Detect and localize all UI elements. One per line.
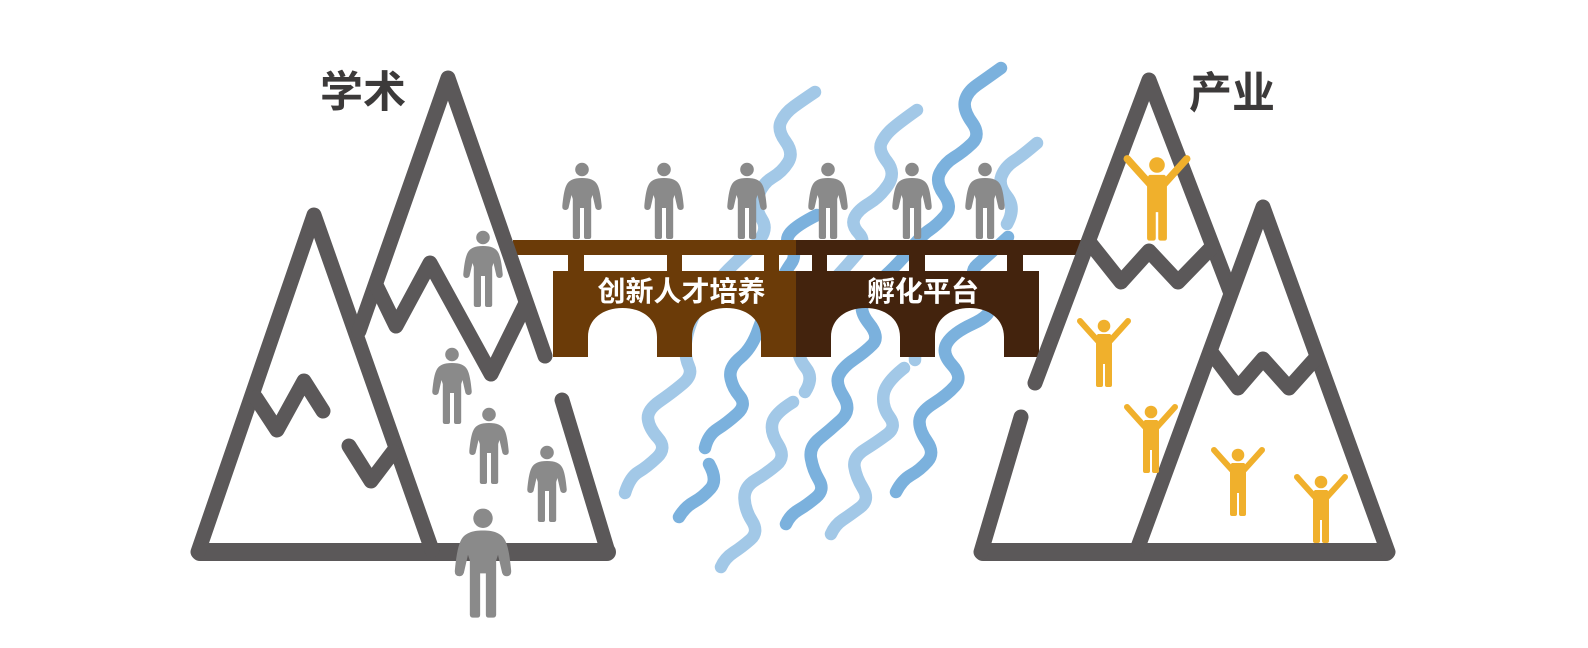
bridge label: 孵化平台: 孵化平台 [867,275,979,307]
river: dark stream 3 [679,464,714,517]
person on bridge 5 [892,163,932,239]
person cheering 2 [1080,320,1128,387]
person cheering 5 [1297,476,1345,543]
river: dark stream 2 [705,215,817,448]
river: light stream 6 [909,345,921,360]
person cheering 3 [1127,406,1175,473]
mountain base [200,543,607,561]
bridge section: 创新人才培养 [513,240,796,357]
person climbing 2 [432,348,472,424]
heading: 产业: 产业 [1189,70,1275,118]
mountain: far right slope [562,400,608,552]
person on bridge 1 [562,163,602,239]
snow line: back peak [1090,243,1212,282]
person climbing 1 [463,231,503,307]
mountain: back peak upper [1035,80,1230,383]
bridge label: 创新人才培养: 创新人才培养 [597,276,766,307]
person on bridge 6 [965,163,1005,239]
snow line: front peak left [256,381,323,430]
river: light stream 2 [797,110,917,392]
river: dark stream 1 [786,68,1001,524]
people in academia [432,231,567,618]
rivers [625,68,1037,567]
person climbing 3 [469,408,509,484]
panel: academia mountains [198,69,608,552]
heading: 学术: 学术 [320,69,406,117]
mountain: front peak [198,215,432,552]
person on bridge 2 [644,163,684,239]
person large in front [455,509,511,618]
person cheering 1 [1127,157,1187,241]
person cheering 4 [1214,449,1262,516]
mountain: back peak [359,78,545,356]
person climbing 4 [527,446,567,522]
bridge [513,240,1081,357]
person on bridge 4 [808,163,848,239]
people in industry [1080,157,1345,543]
people on the bridge [562,163,1005,239]
snow line: back peak [377,263,526,374]
mountain: lower left slope [981,417,1021,552]
river: light stream 5 [831,368,904,534]
river: light stream 3 [721,402,793,567]
panel: industry mountains [981,70,1388,552]
mountain base [983,543,1386,561]
river: dark stream 4 [896,237,1008,492]
mountain: front peak [1138,207,1388,552]
river: light stream 1 [625,92,815,493]
snow line: front peak [1211,352,1315,388]
bridge section: 孵化平台 [796,240,1081,357]
river: light stream 4 [1001,143,1037,224]
person on bridge 3 [727,163,767,239]
snow line: front peak right [349,446,393,481]
